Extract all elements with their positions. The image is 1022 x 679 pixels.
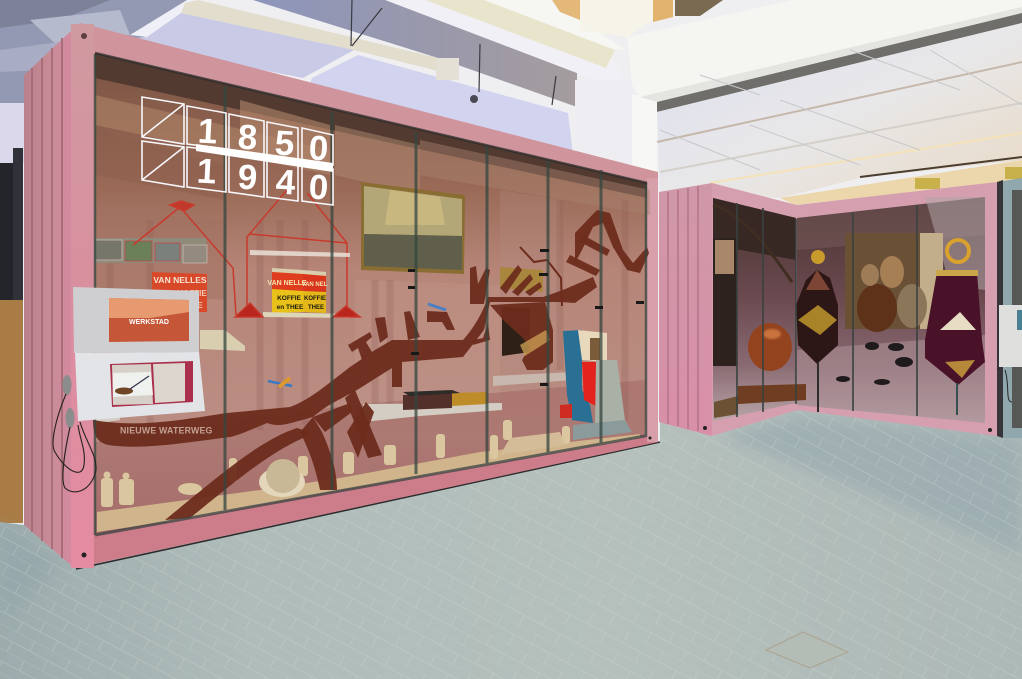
soldier helmet (259, 459, 305, 497)
black display pegs (408, 249, 644, 386)
ceiling camera (470, 95, 478, 103)
side panel of left container (24, 30, 72, 566)
top row digits 1850: 0 (308, 129, 329, 168)
red Van Nelles poster: KOFFIE (177, 289, 207, 298)
sloped branch to right (313, 403, 352, 432)
bottom row digits 1940: 4 (275, 163, 297, 203)
container corner holes (82, 436, 652, 558)
banner two with gold crown (925, 240, 985, 415)
yellow Van Nelle crate: KOFFIE (304, 296, 326, 302)
miniature black and orange model buildings (403, 390, 487, 410)
year counter 1850–1940 (142, 97, 333, 207)
upper stubs (375, 317, 388, 343)
lower root two (300, 417, 337, 490)
lower kiosk panel (75, 352, 205, 421)
glass front with room behind it (95, 53, 650, 535)
yellow Van Nelle crate: en THEE (277, 304, 304, 311)
floor hatch cover (766, 632, 848, 668)
glass with contents, corner view (713, 197, 985, 423)
top row digits 1850: 8 (237, 118, 258, 157)
main trunk (93, 277, 597, 447)
display trays and shelves (95, 330, 573, 424)
glass pane mullions (95, 53, 647, 535)
reflection strip across glass (250, 250, 350, 257)
yellow Van Nelle crate (263, 268, 350, 318)
object screen with ladle (110, 361, 193, 407)
red display lamps and stands (133, 190, 360, 317)
upper kiosk panel (73, 287, 199, 353)
brown river map silhouette (93, 210, 649, 520)
NIEUWE WATERWEG label: NIEUWE WATERWEG (120, 426, 213, 436)
side panel of right container (659, 183, 712, 436)
pink frame of left container (72, 23, 658, 568)
WERKSTAD screen: WERKSTAD (129, 319, 169, 326)
colourful cross-section model (560, 330, 632, 440)
wooden chest (738, 384, 806, 404)
dark painting behind tree (502, 307, 530, 356)
corner hole (81, 33, 87, 39)
bottom row digits 1940: 9 (237, 158, 258, 197)
white divider bar (196, 144, 333, 172)
audio headphones with cords (53, 375, 96, 492)
red Van Nelles poster: E (197, 301, 203, 310)
cream miniature figures on the floor scene (97, 420, 640, 532)
yellow Van Nelle crate: VAN NELLE (267, 280, 307, 287)
landscape painting (361, 182, 465, 274)
copper diving helmet (748, 323, 792, 371)
bottom row digits 1940: 0 (308, 168, 329, 207)
yellow Van Nelle crate: THEE (308, 305, 324, 311)
right pink display container (659, 182, 997, 436)
dark instruments column (713, 238, 737, 366)
pink frame of right container (712, 182, 997, 436)
top row digits 1850: 1 (197, 112, 218, 151)
middle block (490, 302, 553, 370)
kiosk touch-screen panel (73, 287, 205, 421)
second small gold painting (500, 267, 543, 292)
banner one with gold emblem (796, 250, 838, 412)
crossing roots (345, 390, 382, 458)
bottom row digits 1940: 1 (196, 152, 217, 191)
figure group (101, 420, 570, 507)
T branch (348, 332, 372, 360)
floor (0, 408, 1022, 679)
red Van Nelles poster (152, 272, 207, 312)
top row digits 1850: 5 (274, 124, 295, 163)
yellow Van Nelle crate: KOFFIE (277, 295, 302, 302)
bottom row digits 1940 (196, 152, 329, 207)
screw holes (703, 426, 992, 432)
red Van Nelles poster: VAN NELLES (153, 275, 207, 285)
window-strip exhibit on back wall (94, 238, 207, 263)
grey-blue container at right edge (985, 178, 1022, 438)
grid outlines (142, 97, 333, 205)
left pink display container (24, 23, 658, 568)
lower root one (165, 428, 310, 520)
yellow Van Nelle crate: VAN NEL (302, 282, 328, 288)
top row digits 1850 (197, 112, 329, 168)
slashes above horizontal (500, 265, 542, 296)
painting of workers (845, 233, 943, 332)
small dark objects on pegs (836, 342, 913, 385)
long curve to upper right (575, 210, 649, 273)
toy aeroplanes (268, 304, 446, 387)
fork at top (470, 266, 490, 304)
